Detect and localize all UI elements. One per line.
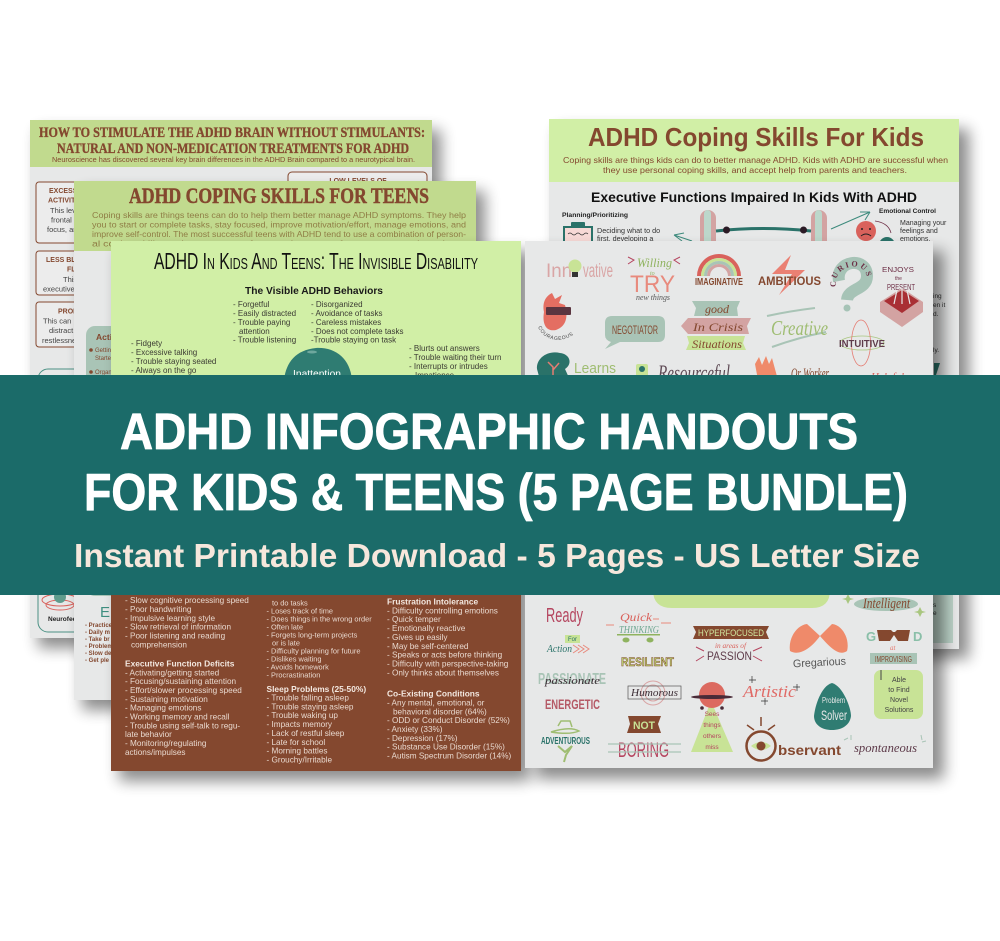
sticker: good in crisis situations <box>681 301 751 351</box>
callout: excessive activity <box>36 182 116 243</box>
sticker: enjoys the present <box>880 265 923 327</box>
callout: excessive activity: frontal <box>51 216 72 224</box>
lower left list: - Get ple <box>85 658 110 664</box>
sticker: problem solver: Solver <box>821 707 847 723</box>
emotional control block: Managing your <box>900 220 947 227</box>
list: inattention behaviors left <box>233 300 296 344</box>
sticker: hyperfocused in areas of passion <box>693 626 769 663</box>
list: frustration intolerance: - Emotionally reactive <box>387 624 466 633</box>
list: executive function deficits: - Activating/getting started <box>125 668 220 677</box>
sticker: courageous <box>538 293 573 340</box>
sticker: negotiator <box>605 316 665 349</box>
sticker: resourceful <box>636 360 730 385</box>
sticker: adventurous: ADVENTUROUS <box>541 736 590 747</box>
sticker: hyperfocused in areas of passion: PASSION <box>707 649 752 663</box>
list: time management: to do tasks <box>272 598 308 607</box>
sticker: negotiator: NEGOTIATOR <box>612 323 658 337</box>
sticker: spontaneous: spontaneous <box>854 740 917 755</box>
sticker: not boring: BORING <box>618 739 669 762</box>
list: executive function deficits: - Sustaining motivation <box>125 695 208 704</box>
sticker: good at improvising: G <box>866 629 876 644</box>
bottom right teal panel: s <box>933 602 937 609</box>
callout: low levels <box>288 172 427 232</box>
sticker: imaginative <box>695 254 743 288</box>
list: inattention behaviors right: - Avoidance of tasks <box>311 309 382 318</box>
list: time management: - Procrastination <box>266 670 320 680</box>
sticker: problem solver <box>814 683 851 730</box>
sticker: sees things others miss: Sees <box>705 711 720 718</box>
callout: less blood flow: executive <box>43 284 75 294</box>
callout: excessive activity: This level <box>50 206 82 215</box>
list: time management: - Difficulty planning for future <box>266 646 360 656</box>
list: sleep problems: - Trouble staying asleep <box>266 702 354 712</box>
sticker: sees things others miss: things <box>703 722 721 729</box>
sticker: willing to try: to <box>650 271 655 277</box>
heading: executive functions: Executive Functions Impaired In Kids With ADHD <box>591 189 917 205</box>
list: time management: or is late <box>272 638 300 648</box>
sticker: good in crisis situations: good <box>705 302 730 316</box>
list: time management: - Loses track of time <box>266 606 333 615</box>
bottom right teal panel: e <box>933 610 937 617</box>
banner subtitle: Instant Printable Download - 5 Pages - US Letter Size <box>74 537 920 574</box>
sticker: ready for action: Action <box>546 644 572 655</box>
sticker: intelligent: Intelligent <box>862 596 911 612</box>
list: inattention behaviors right <box>311 300 403 344</box>
sticker: willing to try: Willing <box>637 255 672 270</box>
callout: less blood flow: LESS BLOOD <box>46 257 92 264</box>
sticker: curious question mark <box>830 256 873 312</box>
list: sleep problems: - Lack of restful sleep <box>266 729 345 738</box>
callout: excessive activity: EXCESSIVE <box>49 188 89 195</box>
kids intro paragraph: Coping skills are things kids can do to better manage ADHD. Kids with ADHD are successful when <box>563 155 948 165</box>
handout title: stimulate the ADHD brain: NATURAL AND NON-MEDICATION TREATMENTS FOR ADHD <box>57 141 409 157</box>
list: executive function deficits: - Trouble using self-talk to regu- <box>125 721 240 730</box>
list: learning problems: - Slow retrieval of information <box>125 622 231 632</box>
list: learning problems: - Impulsive learning style <box>125 614 216 623</box>
callout: less blood flow: FLOW <box>67 266 88 274</box>
list: frustration intolerance: - Quick temper <box>387 615 441 624</box>
callout: excessive activity: ACTIVITY <box>48 198 80 204</box>
list: hyperactivity: - Always on the go <box>131 366 197 375</box>
sticker: innovative: Inn <box>546 261 572 282</box>
lower left list: - Practice <box>85 623 113 629</box>
sticker: passionate: passionate <box>544 676 601 687</box>
activation panel <box>86 326 146 596</box>
list: inattention behaviors right: - Does not complete tasks <box>311 327 403 336</box>
lower left list: - Slow de <box>85 651 112 657</box>
list: co-existing conditions: - Depression (17%) <box>387 734 458 743</box>
list: learning problems <box>125 596 249 650</box>
activation panel: Started <box>95 356 114 362</box>
emotional control block: Emotional Control <box>879 208 936 215</box>
callout: problems <box>36 302 116 347</box>
sticker: not boring: NOT <box>633 720 655 732</box>
planning block: Deciding what to do <box>597 226 660 235</box>
sticker: learns: Learns <box>574 360 616 377</box>
handout title: kids: ADHD Coping Skills For Kids <box>588 122 924 152</box>
sticker: able to find novel solutions: to Find <box>888 687 910 694</box>
sticker: spontaneous <box>844 735 926 755</box>
list: inattention behaviors right: - Careless mistakes <box>311 318 381 327</box>
lower left list <box>85 604 163 664</box>
planning block: first, developing a <box>597 234 653 243</box>
list: frustration intolerance: Frustration Intolerance <box>387 596 479 606</box>
kids intro paragraph <box>563 155 948 175</box>
sticker: quick thinking <box>606 610 671 642</box>
planning block: Planning/Prioritizing <box>562 212 628 219</box>
callout: neurofeedback <box>38 369 128 632</box>
sticker: able to find novel solutions: Solutions <box>885 707 914 714</box>
list: learning problems: - Slow cognitive processing speed <box>125 596 249 605</box>
sticker: hard worker <box>755 356 829 382</box>
emotional control block: emotions. <box>900 236 930 243</box>
sticker: creative <box>767 308 828 347</box>
sticker: intuitive <box>839 320 885 366</box>
lower left list: ENERGY <box>100 604 163 621</box>
list: time management: - Avoids homework <box>266 662 329 672</box>
panel: coping skills for teens handout <box>74 181 485 710</box>
arrow: to planning <box>674 233 692 241</box>
sticker: enjoys the present: the <box>895 276 902 282</box>
handout title: stimulate the ADHD brain <box>39 125 425 164</box>
sticker: energetic: ENERGETIC <box>545 696 600 712</box>
list: hyperactivity: - Trouble staying seated <box>131 357 216 366</box>
sticker: enjoys the present: ENJOYS <box>882 265 914 274</box>
list: sleep problems <box>266 684 366 764</box>
callout: problems: This can <box>43 316 71 326</box>
sticker: ready for action: Ready <box>546 605 583 627</box>
heading: visible behaviors: The Visible ADHD Behaviors <box>245 286 383 297</box>
sticker: resilient: RESILIENT <box>621 655 675 669</box>
list: sleep problems: - Morning battles <box>266 746 327 756</box>
activation panel: Activation <box>96 332 137 342</box>
list: impulsivity: - Interrupts or intrudes <box>409 362 488 371</box>
list: executive function deficits: Executive Function Deficits <box>125 658 235 668</box>
sticker: curious question mark: CURIOUS <box>830 261 872 286</box>
sticker: learns <box>537 352 616 380</box>
sticker: observant: bservant <box>778 742 841 758</box>
list: executive function deficits: actions/impulses <box>125 748 186 757</box>
callout: problems: distract <box>49 326 74 335</box>
list: learning problems: - Poor listening and reading <box>125 632 226 640</box>
sticker: good at improvising <box>866 629 922 664</box>
sticker: intelligent <box>842 594 926 617</box>
list: impulsivity: Impatience <box>415 371 455 380</box>
icon: inattention brain <box>284 348 352 380</box>
emotional control block <box>856 208 947 253</box>
callout: neurofeedback: Neurofeedback <box>48 616 95 623</box>
list: frustration intolerance: - Only thinks about themselves <box>387 668 499 677</box>
sticker: enjoys the present: PRESENT <box>887 283 915 292</box>
icon: brain bar diagram <box>700 210 827 250</box>
list: inattention behaviors right: - Disorganized <box>311 300 363 309</box>
panel: invisible disability handout <box>111 241 530 781</box>
list: time management: - Does things in the wrong order <box>266 614 372 624</box>
list: hyperactivity: - Excessive talking <box>131 348 197 357</box>
list: executive function deficits: late behavior <box>125 730 172 739</box>
list: co-existing conditions: - Substance Use Disorder (15%) <box>387 743 505 752</box>
sticker: artistic <box>742 676 800 705</box>
right edge text fragments: ing <box>933 293 942 300</box>
sticker: good at improvising: at <box>890 644 896 652</box>
sticker: gregarious hands <box>790 624 848 670</box>
handout title: invisible disability: ADHD In Kids And Teens: The Invisible Disability <box>154 248 478 274</box>
list: executive function deficits: - Effort/slower processing speed <box>125 686 242 695</box>
sticker: sees things others miss: others <box>703 733 722 740</box>
panel: natural treatments handout (back left) <box>30 120 441 648</box>
emotional control block: feelings and <box>900 228 938 235</box>
sticker: problem solver: Problem <box>822 696 845 705</box>
callout: excessive activity: focus, and <box>47 225 82 234</box>
list: inattention behaviors left: - Easily distracted <box>233 309 296 318</box>
sticker: sees things others miss <box>691 682 733 752</box>
sticker: helpful: Helpful <box>870 371 904 383</box>
callout: low levels: LOW LEVELS OF <box>329 178 387 185</box>
lower left list: - Take br <box>85 637 110 643</box>
list: executive function deficits <box>125 658 242 757</box>
teens intro paragraph <box>92 210 466 248</box>
list: sleep problems: - Trouble waking up <box>266 711 338 720</box>
list: frustration intolerance: - May be self-centered <box>387 642 469 651</box>
sticker: imaginative: IMAGINATIVE <box>695 277 743 288</box>
sticker: willing to try: TRY <box>630 271 675 298</box>
list: co-existing conditions: - Any mental, emotional, or <box>387 698 485 708</box>
planning block <box>562 212 660 257</box>
list: inattention behaviors right: -Trouble staying on task <box>311 336 397 344</box>
green lower blob <box>653 590 830 608</box>
sticker: humorous: Humorous <box>630 687 678 699</box>
sticker: hyperfocused in areas of passion: in areas of <box>715 642 747 650</box>
sticker: passionate: PASSIONATE <box>538 671 606 688</box>
sticker: able to find novel solutions <box>874 670 923 719</box>
teens intro paragraph: al coping skills, and acceptance of external supports from parents and teachers. <box>92 238 466 248</box>
sticker: able to find novel solutions: Able <box>892 677 906 684</box>
list: sleep problems: - Trouble falling asleep <box>266 694 349 702</box>
teens intro paragraph: improve self-control. The most successful teens with ADHD tend to use a combination of person- <box>92 229 466 239</box>
list: executive function deficits: - Working memory and recall <box>125 712 230 722</box>
list: sleep problems: Sleep Problems (25-50%) <box>266 684 366 694</box>
list: inattention behaviors left: - Trouble listening <box>233 336 296 344</box>
list: co-existing conditions: behavioral disorder (64%) <box>393 707 487 716</box>
list: sleep problems: - Grouchy/Irritable <box>266 756 332 764</box>
sticker: adventurous <box>541 721 590 762</box>
sticker: observant <box>746 717 841 760</box>
sticker: good at improvising: D <box>913 629 922 644</box>
banner title <box>84 403 908 522</box>
banner title: ADHD INFOGRAPHIC HANDOUTS <box>120 403 858 460</box>
list: sleep problems: - Late for school <box>266 738 325 747</box>
list: co-existing conditions: - Anxiety (33%) <box>387 725 443 734</box>
sticker: hard worker: Or Worker <box>791 366 829 382</box>
sticker: ready for action: For <box>568 637 577 643</box>
teens intro paragraph: Coping skills are things teens can do to help them better manage ADHD symptoms. They help <box>92 210 466 220</box>
arrow: to emotional control <box>831 212 870 229</box>
sticker: not boring <box>608 716 681 762</box>
list: sleep problems: - Impacts memory <box>266 720 333 729</box>
callout: less blood flow <box>36 251 116 295</box>
sticker: sees things others miss: miss <box>705 744 719 751</box>
icon: inattention brain: Inattention <box>293 368 341 380</box>
list: frustration intolerance: - Gives up easily <box>387 633 448 642</box>
list: impulsivity: - Trouble waiting their turn <box>409 353 502 362</box>
lower left list: - Problem <box>85 644 113 650</box>
list: inattention behaviors left: - Forgetful <box>233 300 270 309</box>
sticker: ambitious: AMBITIOUS <box>758 274 821 288</box>
right edge text fragments: ly. <box>933 347 939 354</box>
sticker: ready for action <box>546 605 589 655</box>
list: co-existing conditions: - Autism Spectrum Disorder (14%) <box>387 751 511 760</box>
callout: problems: PROBLEMS <box>58 308 98 316</box>
list: hyperactivity: - Fidgety <box>131 339 162 348</box>
list: time management: - Forgets long-term projects <box>266 630 358 640</box>
list: learning problems: - Poor handwriting <box>125 605 192 614</box>
teens intro paragraph: you to start or complete tasks, stay focused, improve motivation/effort, manage emotions, and <box>92 220 466 230</box>
list: impulsivity: - Blurts out answers <box>409 344 480 353</box>
panel: strengths stickers handout <box>525 240 954 790</box>
list: time management: - Dislikes waiting <box>266 654 322 664</box>
list: executive function deficits: - Monitoring/regulating <box>125 739 207 748</box>
sticker: quick thinking: THINKING <box>619 625 659 636</box>
list: executive function deficits: - Focusing/sustaining attention <box>125 677 236 686</box>
list: time management: - Often late <box>266 622 303 632</box>
sticker: courageous: COURAGEOUS <box>538 326 573 340</box>
list: co-existing conditions <box>387 688 511 760</box>
list: time management: underestimates time it takes <box>272 588 364 597</box>
sticker: good in crisis situations: In Crisis <box>692 320 743 334</box>
sticker: innovative <box>546 260 613 282</box>
sticker: intuitive: INTUITIVE <box>839 339 885 350</box>
sticker: humorous <box>628 681 681 705</box>
list: co-existing conditions: - ODD or Conduct Disorder (52%) <box>387 716 510 725</box>
callout: less blood flow: This <box>63 275 77 284</box>
activation panel: Organize <box>95 370 120 376</box>
list: co-existing conditions: Co-Existing Conditions <box>387 688 480 698</box>
handout title: stimulate the ADHD brain: Neuroscience has discovered several key brain differences in the ADHD Brain compared to a neurotypical brain. <box>52 157 415 164</box>
lower left list: - Daily m <box>85 630 110 636</box>
bottom right teal panel <box>933 363 953 643</box>
sticker: resourceful: Resourceful <box>657 360 730 385</box>
list: executive function deficits: - Managing emotions <box>125 704 201 713</box>
list: frustration intolerance: - Speaks or acts before thinking <box>387 651 503 660</box>
handout title: teens: ADHD COPING SKILLS FOR TEENS <box>129 183 429 208</box>
sticker: hyperfocused in areas of passion: HYPERFOCUSED <box>698 628 764 638</box>
sticker: willing to try <box>628 255 680 302</box>
list: impulsivity <box>409 344 502 380</box>
sticker: able to find novel solutions: Novel <box>890 697 908 704</box>
sticker: willing to try: new things <box>636 293 670 302</box>
list: inattention behaviors left: attention <box>239 327 270 336</box>
handout title: stimulate the ADHD brain: HOW TO STIMULATE THE ADHD BRAIN WITHOUT STIMULANTS: <box>39 125 425 141</box>
list: frustration intolerance: - Difficulty with perspective-taking <box>387 660 509 668</box>
sticker: innovative: vative <box>583 261 613 282</box>
sticker: passionate <box>538 671 606 688</box>
sticker: artistic: Artistic <box>742 682 796 701</box>
list: learning problems: comprehension <box>131 640 187 650</box>
callout: problems: restlessness <box>42 336 84 345</box>
activation panel: Getting <box>95 348 114 354</box>
list: time management <box>266 588 372 680</box>
kids intro paragraph: they use personal coping skills, and accept help from parents and teachers. <box>603 165 907 175</box>
sticker: good at improvising: IMPROVISING <box>875 654 912 664</box>
right edge text fragments: d. <box>933 311 939 318</box>
right edge text fragments: en it <box>933 302 945 309</box>
sticker: creative: Creative <box>771 316 828 340</box>
sticker: good in crisis situations: Situations <box>692 337 742 351</box>
banner <box>0 375 1000 595</box>
sticker: ambitious <box>758 255 821 295</box>
list: inattention behaviors left: - Trouble paying <box>233 318 290 327</box>
list: frustration intolerance: - Difficulty controlling emotions <box>387 606 498 615</box>
panel: coping skills for kids handout <box>549 119 969 659</box>
sticker: gregarious hands: Gregarious <box>793 656 847 670</box>
list: frustration intolerance <box>387 596 509 677</box>
right edge text fragments <box>933 293 945 354</box>
list: hyperactivity <box>131 339 216 375</box>
sticker: quick thinking: Quick <box>620 610 653 624</box>
